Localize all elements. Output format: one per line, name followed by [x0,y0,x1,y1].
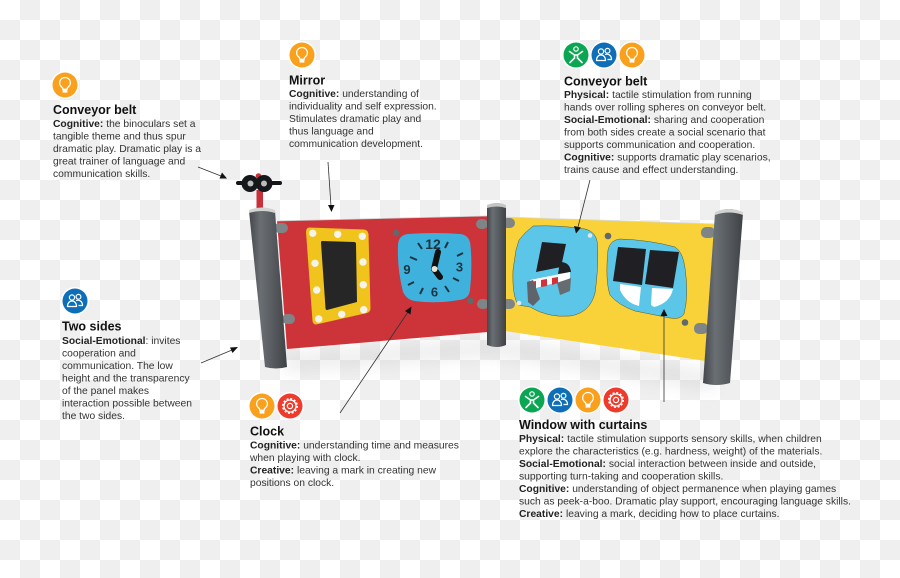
arrow: conveyor belt [574,180,590,234]
icons: clock block [248,392,304,420]
arrow: mirror [328,162,334,212]
text block: binoculars: communication skills. [53,169,150,180]
arrow: binoculars [198,167,227,178]
text block: window with curtains: Social-Emotional: social interaction between inside and outside, [519,459,816,470]
clock: 12 [425,236,441,252]
text block: conveyor belt: hands over rolling spheres on conveyor belt. [564,102,766,114]
icon: social-emotional, two sides block [61,287,89,315]
text block: conveyor belt: Conveyor belt [564,74,648,88]
text block: mirror: individuality and self expression. [289,102,437,112]
text block: binoculars [53,103,201,180]
text block: clock [249,424,459,489]
text block: binoculars: Conveyor belt [53,103,137,117]
text block: clock: Creative: leaving a mark in creating new [250,466,437,476]
clock: 9 [403,262,411,277]
text block: clock: when playing with clock. [249,453,360,464]
text block: mirror [289,74,437,150]
text block: conveyor belt: supports communication and cooperation. [564,140,755,151]
text block: two sides: Social-Emotional: invites [62,336,180,347]
arrow: clock [340,306,412,413]
text block: two sides: communication. The low [62,361,173,372]
text block: binoculars: great trainer of language and [53,156,186,168]
icon: cognitive, binoculars block [51,71,79,99]
right post [703,209,743,385]
binoculars [236,173,282,208]
text block: window with curtains: Physical: tactile stimulation supports sensory skills, when children [519,434,822,445]
text block: mirror: thus language and [289,126,374,138]
window with sliding curtain shape [513,226,598,316]
text block: conveyor belt: Cognitive: supports dramatic play scenarios, [564,152,771,164]
icons: conveyor belt block [562,41,646,69]
text block: conveyor belt: trains cause and effect understanding. [564,165,738,176]
text block: mirror: Stimulates dramatic play and [289,114,421,125]
left post [249,208,287,368]
yellow panel [505,217,717,361]
text block: window with curtains: explore the characteristics (e.g. hardness, weight) of the materials. [519,446,822,458]
mirror frame [306,228,370,324]
text block: window with curtains: such as peek-a-boo. Dramatic play support, encouraging language skills. [519,496,851,508]
text block: conveyor belt [564,74,771,176]
text block: two sides: interaction possible between [62,398,192,410]
text block: conveyor belt: Social-Emotional: sharing and cooperation [564,115,765,126]
arrow: window with curtains [660,309,668,402]
icon: cognitive, mirror block [288,41,316,69]
text block: two sides: of the panel makes [62,386,149,397]
red panel [277,216,488,349]
text block: two sides [62,320,192,422]
text block: window with curtains: Cognitive: understanding of object permanence when playing games [519,484,836,495]
centre post [487,203,506,347]
clock: 3 [456,260,463,274]
bolts [274,218,715,334]
clock: 6 [431,284,438,300]
text block: binoculars: tangible theme and thus spur [53,132,186,142]
text block: mirror: Mirror [289,74,325,88]
ground shadow [285,336,715,392]
text block: conveyor belt: Physical: tactile stimulation from running [564,90,752,101]
text block: window with curtains: Window with curtains [519,418,647,432]
window with two curtains [605,233,688,326]
icons: window with curtains block [518,386,630,414]
text block: clock: Clock [250,424,284,438]
text block: window with curtains [519,418,851,520]
illustration: play panel [236,173,743,385]
text block: mirror: communication development. [289,139,423,150]
text block: mirror: Cognitive: understanding of [289,89,419,100]
text block: two sides: height and the transparency [62,374,191,384]
text block: conveyor belt: from both sides create a social scenario that [564,128,766,138]
text block: two sides: Two sides [62,320,122,334]
arrow: two sides [201,347,238,363]
clock [393,230,474,304]
text block: two sides: the two sides. [62,411,125,422]
text block: two sides: cooperation and [62,348,136,360]
text block: window with curtains: supporting turn-taking and cooperation skills. [519,472,723,482]
text block: binoculars: Cognitive: the binoculars set a [53,119,196,130]
text block: clock: Cognitive: understanding time and measures [250,440,459,452]
text block: binoculars: dramatic play. Dramatic play is a [53,144,201,155]
text block: clock: positions on clock. [250,478,334,489]
text block: window with curtains: Creative: leaving a mark, deciding how to place curtains. [519,509,779,520]
